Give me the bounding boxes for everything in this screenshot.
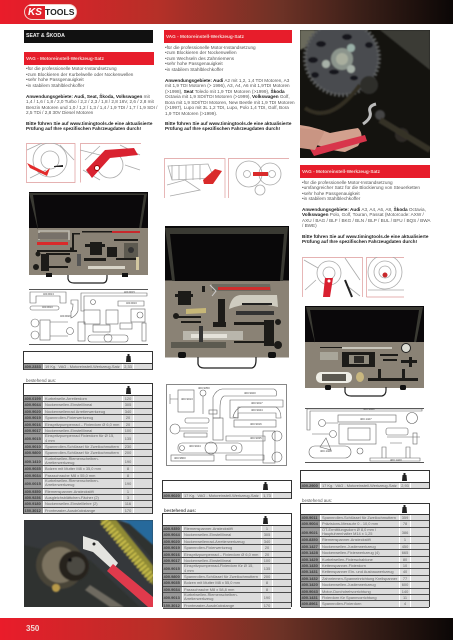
left contents table: Passschraube M8 x 55,0 mm bbox=[45, 473, 95, 478]
weight icon bbox=[126, 386, 131, 394]
middle tool diagram: 400.9013 bbox=[181, 397, 193, 401]
left features list: •in stabilem Stahlblechkoffer bbox=[26, 82, 84, 88]
left contents table: Einspritzpumpenrad – Fixierdorn Ø 6,0 mm bbox=[45, 422, 119, 427]
left contents table: Nockenwellen-Einstelllehre (2) bbox=[45, 501, 98, 506]
right summary table: 2,93 bbox=[401, 483, 409, 488]
left contents table: 400.9350 bbox=[24, 489, 41, 494]
left contents table: Spannrollen-Fixierwerkzeug bbox=[45, 415, 93, 420]
right tool diagram: 400.1427 bbox=[360, 417, 372, 421]
left tool diagram bbox=[29, 289, 148, 345]
middle summary table: 400.9020 bbox=[164, 493, 180, 498]
right application text bbox=[302, 206, 431, 228]
right contents table: 77 bbox=[403, 576, 407, 581]
left contents table: Arretierwerkzeug bbox=[45, 482, 74, 487]
right contents table: 600 bbox=[402, 582, 408, 587]
right application text: / BWE) bbox=[302, 223, 317, 228]
left contents table: 400.9800 bbox=[24, 450, 41, 455]
middle contents table: 400.9020 bbox=[164, 539, 180, 544]
left contents table: 135 bbox=[125, 436, 131, 441]
right contents table: 80 bbox=[403, 557, 407, 562]
left notice bbox=[26, 120, 152, 131]
middle contents table: 340 bbox=[264, 539, 270, 544]
left contents table: Ausgleichsblättchen-Fächer (2) bbox=[45, 495, 99, 500]
right contents table: 400.1429 bbox=[302, 557, 318, 562]
left tool case photo bbox=[29, 192, 148, 284]
left application text: Benzin Motoren und 1,0 / 1,2 / 1,3 / 1,4 / 1,9 TDI / 1,7 / 1,9 SDI / bbox=[26, 104, 157, 110]
right contents table: Nockenwellen-Justierwerkzeug bbox=[322, 544, 376, 549]
middle contents table: 170 bbox=[264, 603, 270, 608]
weight icon bbox=[402, 473, 407, 481]
weight icon bbox=[263, 482, 268, 490]
left features list bbox=[26, 66, 134, 88]
middle tool diagram bbox=[166, 384, 287, 466]
left contents table: 340 bbox=[125, 409, 131, 414]
left panel title: VAG - Motoreinstell-Werkzeug-Satz bbox=[26, 56, 104, 61]
left contents table: Nockenwellen-Einstelllineal bbox=[45, 428, 92, 433]
right contents table: 4 bbox=[404, 601, 406, 606]
left contents table: 20 bbox=[126, 415, 130, 420]
left features list: •für die professionelle Motor-Instandsetzung bbox=[26, 66, 117, 71]
left contents table: 400.9017 bbox=[24, 428, 41, 433]
left contents table: 200 bbox=[125, 450, 131, 455]
left contents table: Nockenwellenrad Arretierwerkzeug bbox=[45, 409, 105, 414]
middle tool diagram: 400.9017 bbox=[251, 401, 263, 405]
right contents table: 400.8961 bbox=[302, 601, 318, 606]
middle contents table: 20 bbox=[265, 545, 269, 550]
left contents table: 400.9020 bbox=[24, 409, 41, 414]
left contents table: 20 bbox=[126, 422, 130, 427]
middle application text: mit 1,9 TDI Motoren (> 1996), A3, A4, A6 mit 1,9TDI Motoren bbox=[165, 83, 290, 88]
left contents label: bestehend aus: bbox=[26, 378, 56, 382]
left tool diagram: 400.9010 bbox=[42, 305, 53, 309]
right contents table: 400.1428 bbox=[302, 550, 318, 555]
right contents table: 400.9043 bbox=[302, 588, 318, 594]
left contents table: 116 bbox=[125, 501, 131, 506]
middle application text: Anwendungsgebiete: Audi A2 mit 1,2, 1,4 TDI Motoren, A3 bbox=[165, 78, 289, 82]
middle contents table: Frontmaster-Ausdrückstange bbox=[184, 603, 234, 608]
right contents table: Nockenwellen-Justierwerkzeug bbox=[322, 582, 376, 587]
middle application text: Bora mit 1,9 SDI/TDI Motoren, New Beetle mit 1,9 TDI Motoren bbox=[165, 100, 295, 104]
left contents table bbox=[23, 383, 153, 514]
right contents table: 78 bbox=[403, 521, 407, 526]
left contents table: 400.9010 bbox=[24, 444, 41, 449]
middle application text: Octavia mit 1,9 SDI/TDI Motoren (>1999), Volkswagen Golf, bbox=[165, 94, 290, 99]
middle notice bbox=[165, 120, 292, 131]
right application text: Anwendungsgebiete: Audi A3, A4, A6, A8, Škoda Octavia, bbox=[302, 206, 426, 212]
right contents table: Nockenwellen-Fixierwerkzeug (4) bbox=[322, 550, 380, 555]
left contents table: 230 bbox=[125, 444, 131, 449]
left summary table bbox=[23, 351, 153, 370]
right summary table: 17 Kg. VAG - Motoreinstell-Werkzeug-Satz bbox=[322, 483, 397, 488]
middle tool diagram: 400.9020 bbox=[244, 391, 256, 395]
middle contents table: 400.9017 bbox=[164, 558, 180, 563]
middle summary table: 17 Kg. VAG - Motoreinstell-Werkzeug-Satz bbox=[184, 493, 259, 498]
left contents table: 1 bbox=[127, 489, 129, 494]
left tool diagram: 400.9016 bbox=[126, 301, 137, 305]
middle summary table bbox=[162, 480, 292, 499]
left contents table: 400.9180 bbox=[24, 501, 41, 506]
left contents table: 4 mm bbox=[45, 438, 55, 443]
middle features list bbox=[165, 44, 256, 72]
middle contents table: Spannrollen-Schlüssel für Zweilochmuttern bbox=[184, 574, 258, 579]
right contents table: Zahnriemen-Spanneinrichtung Kreilspanner bbox=[322, 576, 397, 581]
middle contents table: Nockenwellen-Einstelllineal bbox=[184, 558, 231, 563]
right features list: •in stabilem Stahlblechkoffer bbox=[302, 196, 360, 201]
right contents table: 665 bbox=[402, 550, 408, 555]
middle tool diagram: 400.9044 bbox=[189, 444, 201, 448]
left contents table: 305 bbox=[125, 402, 131, 407]
middle contents table: 20 bbox=[265, 552, 269, 557]
right tool case photo bbox=[305, 306, 424, 398]
right notice: Prüfung auf Ihre spezifischen Fahrzeugdaten durch! bbox=[302, 239, 417, 244]
left contents table: 400.0199 bbox=[24, 396, 41, 401]
middle contents table: 400.9019 bbox=[164, 545, 180, 550]
bottom left photo bbox=[24, 520, 153, 607]
right contents table: 400.9021 bbox=[302, 530, 318, 535]
right notice: Bitte führen Sie auf www.timingtools.de eine aktualisierte bbox=[302, 234, 428, 238]
middle tool diagram: 400.9035 bbox=[250, 436, 262, 440]
right features list: •umfangreicher Satz für die Blockierung von Steuerketten bbox=[302, 185, 420, 190]
middle contents table: 400.9013 bbox=[164, 595, 180, 600]
left contents table: 190 bbox=[125, 481, 131, 486]
middle features list: •sehr hohe Passgenauigkeit bbox=[165, 61, 223, 66]
middle contents table: Arretierwerkzeug bbox=[184, 596, 213, 601]
right contents table: 400.8350 bbox=[302, 537, 318, 542]
right contents table: 10 bbox=[403, 563, 407, 568]
middle contents table: 400.9015 bbox=[164, 566, 180, 571]
middle contents table: 400.9034 bbox=[164, 587, 180, 592]
middle features list: •in stabilem Stahlblechkoffer bbox=[165, 66, 223, 72]
middle contents table: 8 bbox=[266, 587, 268, 592]
left illustrations bbox=[26, 143, 141, 183]
left contents table: 170 bbox=[125, 508, 131, 513]
right contents table bbox=[300, 503, 430, 607]
middle contents table: 400.9035 bbox=[164, 580, 180, 585]
middle notice: Prüfung auf Ihre spezifischen Fahrzeugdaten durch! bbox=[165, 126, 280, 131]
right contents table: 400.1420 bbox=[302, 582, 318, 587]
right contents table: 386 bbox=[402, 530, 408, 535]
right features list: •sehr hohe Passgenauigkeit bbox=[302, 190, 360, 196]
left contents table: 8 bbox=[127, 473, 129, 478]
right contents table: Präzisions-Messuhr 0 - 10,0 mm bbox=[322, 521, 378, 526]
right contents table: 400.9011 bbox=[302, 515, 318, 520]
left contents table: 400.0015 bbox=[24, 481, 41, 486]
right contents label: bestehend aus: bbox=[302, 498, 332, 502]
middle tool diagram: 400.9044 bbox=[251, 408, 263, 412]
left contents table: Bolzen mit Mutter M8 x 35,0 mm bbox=[45, 466, 101, 471]
middle contents table: 400.9016 bbox=[164, 552, 180, 557]
middle features list: •zum Blockieren der Nockenwellen bbox=[165, 50, 237, 55]
left contents table: 400.9015 bbox=[24, 436, 41, 441]
left notice: Bitte führen Sie auf www.timingtools.de eine aktualisierte bbox=[26, 120, 152, 126]
right application text: Volkswagen Polo, Golf, Touran, Passat (Motorcode: AXW / bbox=[302, 212, 424, 217]
middle contents table: 400.9044 bbox=[164, 532, 180, 537]
left tool diagram: 400.9013 bbox=[43, 292, 54, 296]
weight icon bbox=[402, 505, 407, 513]
right panel title bbox=[300, 165, 430, 178]
right illustrations bbox=[302, 257, 404, 298]
right tool diagram: 400.1420 bbox=[390, 458, 402, 462]
left contents table: 400.1410 bbox=[24, 459, 41, 464]
right summary table: 400.2900 bbox=[302, 483, 318, 488]
right contents table: 11 bbox=[403, 595, 407, 600]
section heading: Seat & Skoda bbox=[24, 30, 153, 43]
left contents table: 100 bbox=[125, 428, 131, 433]
left application text: 2,5 TDi / 2,8 30V Diesel Motoren bbox=[26, 110, 93, 115]
left contents table: 150.3012 bbox=[24, 508, 41, 513]
left contents table: 400.9016 bbox=[24, 422, 41, 427]
left features list: •zum Blockieren der Kurbelwelle oder Nockenwellen bbox=[26, 72, 133, 76]
left contents table: 400.9044 bbox=[24, 402, 41, 407]
right contents table: 1 bbox=[404, 537, 406, 542]
middle contents table: 190 bbox=[264, 595, 270, 600]
weight icon bbox=[126, 354, 131, 362]
middle contents table bbox=[162, 513, 292, 607]
middle panel title bbox=[164, 30, 292, 43]
middle contents table: Riemenspanner-Ansteckstift bbox=[184, 526, 233, 531]
middle contents table: Nockenwellen-Einstelllineal bbox=[184, 532, 231, 537]
right contents table: 400.1431 bbox=[302, 595, 318, 600]
left summary table: 19 Kg. VAG - Motoreinstell-Werkzeug-Satz bbox=[45, 364, 120, 369]
right contents table: Motor-Durchdrehvorrichtung bbox=[322, 588, 371, 594]
right tool diagram: 400.1428 bbox=[320, 449, 332, 453]
right contents table: Kettenspanner Ein- und Ausbauwerkzeug bbox=[322, 569, 394, 574]
middle contents table: Bolzen mit Mutter M8 x 55,0 mm bbox=[184, 580, 240, 585]
page number: 350 bbox=[26, 624, 39, 633]
left notice: Prüfung auf Ihre spezifischen Fahrzeugdaten durch! bbox=[26, 126, 141, 131]
left contents table: Riemenspanner-Ansteckstift bbox=[45, 489, 94, 494]
right contents table: Spannrollen-Fixierdorn bbox=[322, 601, 361, 606]
middle contents table: 135 bbox=[264, 566, 270, 571]
middle contents label: bestehend aus: bbox=[164, 508, 196, 512]
right features list bbox=[302, 180, 420, 201]
KS Tools logo: TOOLS bbox=[45, 7, 74, 17]
middle contents table: Einspritzpumpenrad – Fixierdorn Ø 6,0 mm bbox=[184, 552, 258, 557]
right notice bbox=[302, 234, 428, 244]
middle tool diagram: 400.9016 bbox=[250, 422, 262, 426]
KS Tools logo bbox=[24, 4, 77, 20]
middle contents table: 400.9800 bbox=[164, 574, 180, 579]
middle contents table: 200 bbox=[264, 574, 270, 579]
right contents table: Kettenspanner-Fixierdorn bbox=[322, 563, 366, 568]
left contents table: Spannrollen-Schlüssel für Zweilochmuttern bbox=[45, 450, 119, 455]
left features list: •sehr hohe Passgenauigkeit bbox=[26, 77, 84, 82]
middle application text: 1,9 TDI Motoren (>1999). bbox=[165, 110, 217, 116]
section heading: Seat & Skoda: SEAT & ŠKODA bbox=[26, 33, 65, 39]
left contents table: 120 bbox=[125, 396, 131, 401]
left contents table: Kurbelwelle-Arretierdorn bbox=[45, 396, 87, 401]
left contents table: 400.9236 bbox=[24, 495, 41, 500]
left contents table: Nockenwellen-Einstelllineal bbox=[45, 402, 92, 407]
left contents table: 400.9035 bbox=[24, 466, 41, 471]
right contents table: 400.1431 bbox=[302, 569, 318, 574]
left application text: 1,4 / 1,6 / 1,8 / 2,0 Turbo / 2,2 / 2,3 / 1,8 / 2,8 16V, 2,6 / 2,8 mit bbox=[26, 99, 154, 104]
middle features list: •für die professionelle Motor-Instandsetzung bbox=[165, 44, 256, 50]
middle contents table: 150.3012 bbox=[164, 603, 180, 608]
middle contents table: 8 bbox=[266, 580, 268, 585]
right contents table: 359 bbox=[402, 515, 408, 520]
middle notice: Bitte führen Sie auf www.timingtools.de eine aktualisierte bbox=[165, 120, 291, 126]
left contents table: 400.9019 bbox=[24, 415, 41, 420]
left summary table: 400.2333 bbox=[24, 364, 41, 369]
right contents table: Riemenspanner-Ansteckstift bbox=[322, 537, 371, 542]
middle tool diagram: 400.9350 bbox=[198, 386, 210, 390]
middle contents table: Spannrollen-Fixierwerkzeug bbox=[184, 545, 232, 550]
right tool diagram bbox=[305, 408, 424, 463]
top banner bbox=[0, 0, 453, 24]
left panel title bbox=[24, 52, 154, 65]
left contents table: Arretierwerkzeug bbox=[45, 460, 74, 465]
KS Tools logo: KS bbox=[28, 7, 42, 18]
middle contents table: Passschraube M8 x 58,8 mm bbox=[184, 587, 234, 592]
right contents table: 400.9004 bbox=[302, 521, 318, 526]
left application text bbox=[26, 94, 158, 115]
middle application text: (>1997), Lupo mit 3L 1,2 TDI, Lupo, Polo 1,4 TDI, Golf, Bora bbox=[165, 105, 289, 110]
middle tool diagram: 400.9800 bbox=[174, 456, 186, 460]
left contents table: Frontmaster-Ausdrückstange bbox=[45, 508, 95, 513]
middle application text bbox=[165, 78, 295, 116]
right summary table bbox=[300, 470, 430, 489]
middle tool case photo bbox=[165, 226, 289, 369]
left contents table: 400.9034 bbox=[24, 473, 41, 478]
middle contents table: Nockenwellenrad-Arretierwerkzeug bbox=[184, 539, 245, 544]
left application text: Anwendungsgebiete: Audi, Seat, Škoda, Volkswagen mit bbox=[26, 94, 150, 98]
middle application text: (>1998), Seat Toledo mit 1,9 TDI Motoren (>1999), Škoda bbox=[165, 88, 285, 94]
middle illustrations bbox=[164, 158, 289, 198]
right application text: AXU / BAG / BLF / BKG / BLN / BLP / BUL / BFU / BQS / BWA bbox=[302, 218, 431, 222]
right contents table: Hauptuhrenhalter M14 x 1,25 bbox=[322, 531, 372, 536]
left summary table: 2,33 bbox=[124, 364, 132, 369]
middle contents table: 1 bbox=[266, 526, 268, 531]
left contents table: 3 bbox=[127, 495, 129, 500]
right contents table: Fixierdorn für Spannvorrichtung bbox=[322, 595, 376, 600]
middle summary table: 1,73 bbox=[263, 493, 271, 498]
left contents table: 8 bbox=[127, 466, 129, 471]
middle contents table: 400.9350 bbox=[164, 526, 180, 531]
middle features list: •zum Wechseln des Zahnriemens bbox=[165, 56, 234, 60]
weight icon bbox=[263, 516, 268, 524]
right contents table: Kurbelwellen-Fixierschablone bbox=[322, 557, 373, 562]
middle contents table: 305 bbox=[264, 532, 270, 537]
right contents table: 40 bbox=[403, 569, 407, 574]
right contents table: 400.1427 bbox=[302, 544, 318, 549]
right contents table: 140 bbox=[402, 588, 408, 594]
right contents table: Spannrollen-Schlüssel für Zweilochmuttern bbox=[322, 515, 396, 520]
left contents table: Spannrollen-Schlüssel für Zweilochmuttern bbox=[45, 444, 119, 449]
middle panel title: VAG - Motoreinstell-Werkzeug-Satz bbox=[166, 34, 244, 39]
bottom banner bbox=[0, 618, 453, 640]
middle contents table: 4 mm bbox=[184, 568, 194, 573]
left tool diagram: 400.9020 bbox=[60, 314, 71, 318]
left tool diagram: 400.9015 bbox=[124, 290, 135, 294]
right panel title: VAG - Motoreinstell-Werkzeug-Satz bbox=[302, 169, 380, 174]
right contents table: 450 bbox=[402, 544, 408, 549]
right contents table: 400.1430 bbox=[302, 563, 318, 568]
middle contents table: 100 bbox=[264, 558, 270, 563]
right contents table: 400.1432 bbox=[302, 576, 318, 581]
top right photo: timing gear and hand bbox=[300, 30, 430, 158]
right features list: •für die professionelle Motor-Instandsetzung bbox=[302, 180, 393, 184]
left contents table: 190 bbox=[125, 459, 131, 464]
